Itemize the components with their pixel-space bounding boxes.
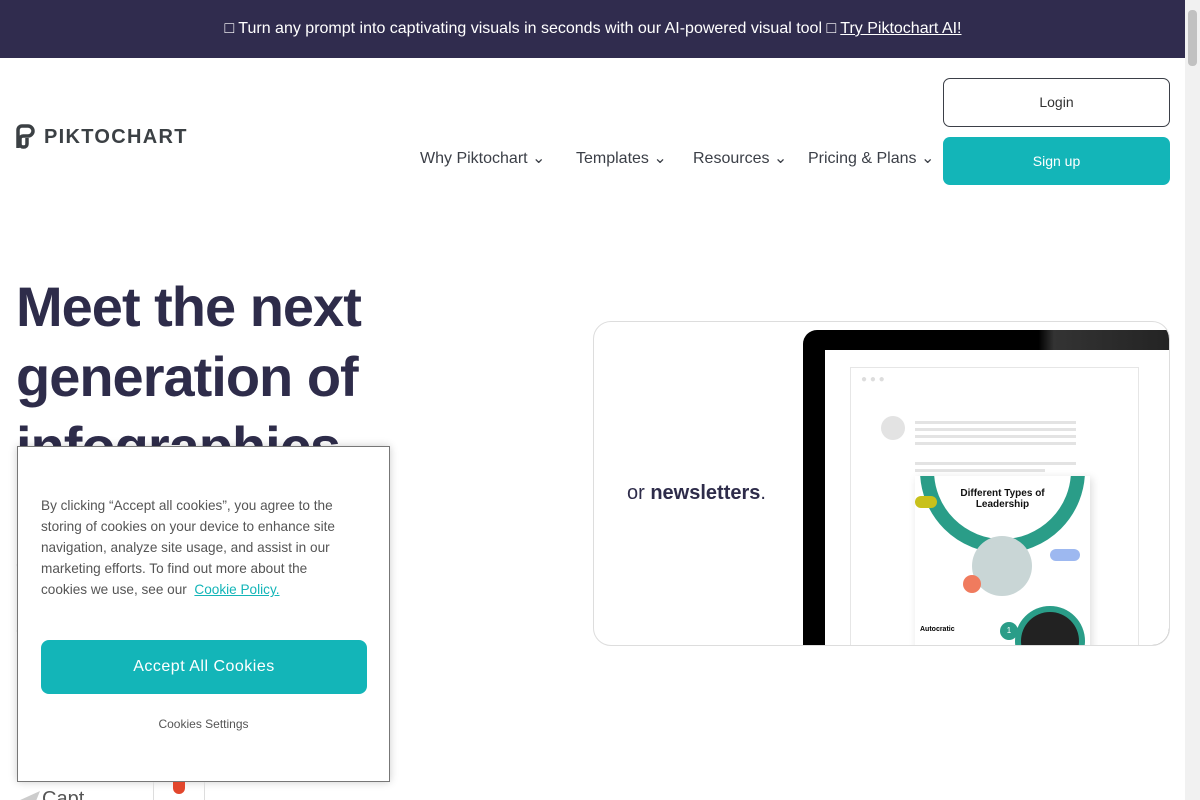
bottom partial text bbox=[20, 788, 84, 800]
nav menu bbox=[420, 150, 934, 167]
cookie settings: Cookies Settings bbox=[158, 717, 249, 731]
hero heading bbox=[16, 275, 362, 478]
top announcement bar bbox=[0, 0, 1200, 58]
infographic thumbnail: 1 bbox=[1007, 626, 1011, 635]
infographic thumbnail: Autocratic bbox=[920, 626, 955, 633]
hero heading: infographics bbox=[16, 415, 340, 478]
sign up button bbox=[943, 137, 1170, 185]
nav menu: Templates ⌄ bbox=[576, 150, 667, 167]
hero subtitle bbox=[16, 518, 310, 642]
device mockup bbox=[803, 330, 1183, 660]
accept button bbox=[41, 640, 367, 694]
document preview: ● ● ● bbox=[861, 374, 885, 385]
hero subtitle: beautiful infographic, poster, bbox=[16, 584, 291, 609]
infographic thumbnail: Different Types of bbox=[960, 488, 1045, 499]
nav menu: Pricing & Plans ⌄ bbox=[808, 150, 934, 167]
nav menu: Resources ⌄ bbox=[693, 150, 787, 167]
hero heading: Meet the next bbox=[16, 275, 361, 338]
infographic thumbnail: Leadership bbox=[976, 499, 1029, 510]
rotating text: or newsletters. bbox=[627, 482, 766, 504]
logo: PIKTOCHART bbox=[44, 126, 188, 148]
accept button: Accept All Cookies bbox=[133, 658, 275, 675]
cookie text: By clicking “Accept all cookies”, you agree to the storing of cookies on your device to enhance site navigation, analyze site usage, and assist in our marketing efforts. To find out more about the cookies we use, see our Cookie Policy. bbox=[41, 498, 335, 597]
hero subtitle: design tool turns ideas into a bbox=[16, 551, 296, 576]
bottom badge bbox=[153, 782, 205, 800]
hero heading: generation of bbox=[16, 345, 358, 408]
infographic thumbnail bbox=[915, 476, 1090, 676]
login button bbox=[943, 78, 1170, 127]
sign up button: Sign up bbox=[1033, 153, 1080, 169]
top announcement bar: □ Turn any prompt into captivating visuals in seconds with our AI-powered visual tool □ Try Piktochart AI! bbox=[224, 20, 962, 37]
scrollbar bbox=[1185, 0, 1200, 800]
hero subtitle: Piktochart's AI-powered bbox=[16, 518, 255, 543]
login button: Login bbox=[1039, 94, 1074, 110]
hero subtitle: or report you can send to your bbox=[16, 617, 310, 642]
document preview bbox=[850, 367, 1139, 667]
nav menu: Why Piktochart ⌄ bbox=[420, 150, 545, 167]
cookie banner bbox=[17, 446, 390, 782]
hero visual panel bbox=[593, 321, 1170, 646]
